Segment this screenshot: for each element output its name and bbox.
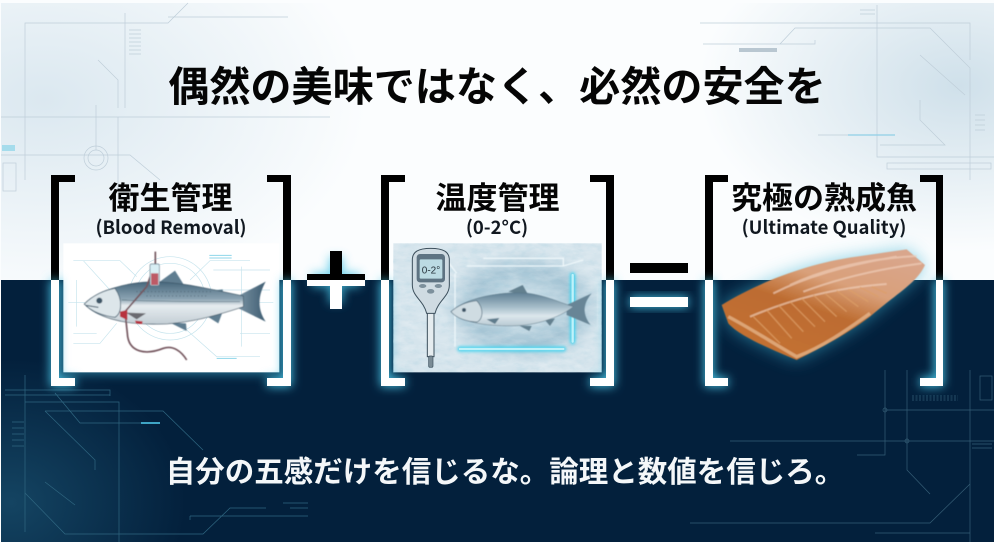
panel glow: blood removal <box>63 280 279 375</box>
fillet lower edge <box>728 313 870 357</box>
blood tube <box>125 252 187 360</box>
right bracket: black upper part <box>920 175 943 280</box>
left bracket: black upper part <box>381 175 405 280</box>
fish tail <box>567 293 592 325</box>
circuit lines: top left <box>1 3 330 191</box>
panel: blood removal <box>51 175 291 386</box>
glowing light bars <box>460 275 573 349</box>
background: navy lower half <box>1 280 994 542</box>
circuit lines: top right <box>700 5 994 180</box>
right bracket: black upper part <box>267 175 291 280</box>
fish tail <box>235 282 266 322</box>
right bracket: white lower part <box>267 280 291 386</box>
panel: ultimate quality <box>705 175 943 386</box>
left bracket: white lower part <box>381 280 405 386</box>
fish fins <box>157 271 223 331</box>
heading: ultimate quality: 究極の熟成魚 <box>731 181 917 216</box>
fish body <box>451 293 573 326</box>
equals sign <box>630 263 688 307</box>
thermometer <box>412 248 449 367</box>
right bracket: white lower part <box>590 280 614 386</box>
right bracket: black upper part <box>590 175 614 280</box>
subheading: blood removal: (Blood Removal) <box>95 214 247 240</box>
fish spots <box>137 292 213 296</box>
panel: temperature control <box>381 175 614 386</box>
bracket glow <box>709 280 939 382</box>
plus sign <box>307 251 365 309</box>
illustration: fish with blood removal tube <box>63 243 279 372</box>
fillet flesh <box>722 249 925 360</box>
title: 偶然の美味ではなく、必然の安全を <box>168 64 826 110</box>
left bracket: white lower part <box>705 280 728 386</box>
fish fins <box>508 285 555 331</box>
left bracket: black upper part <box>705 175 728 280</box>
background: light upper half <box>0 0 1001 280</box>
thermometer reading: 0-2° <box>422 266 440 277</box>
heading: temperature control: 温度管理 <box>436 181 560 216</box>
fish head <box>84 288 121 317</box>
right page margin <box>994 0 1001 542</box>
illustration: frozen fish and thermometer <box>393 243 602 372</box>
circuit lines: bottom left <box>5 375 308 542</box>
fish lateral line <box>122 300 240 302</box>
fillet glow <box>722 249 925 360</box>
closing message: 自分の五感だけを信じるな。論理と数値を信じろ。 <box>166 456 844 489</box>
circuit lines: bottom right <box>690 370 994 542</box>
right bracket: white lower part <box>920 280 943 386</box>
subheading: temperature control: (0-2°C) <box>466 214 528 240</box>
bracket glow <box>55 280 287 382</box>
illustration: salmon fillet <box>722 249 925 360</box>
bracket glow <box>385 280 610 382</box>
left bracket: black upper part <box>51 175 75 280</box>
fish body <box>84 282 243 324</box>
fillet ribs <box>753 287 887 343</box>
left bracket: white lower part <box>51 280 75 386</box>
subheading: ultimate quality: (Ultimate Quality) <box>742 214 906 240</box>
fillet ridges <box>750 256 922 317</box>
heading: blood removal: 衛生管理 <box>108 181 232 216</box>
